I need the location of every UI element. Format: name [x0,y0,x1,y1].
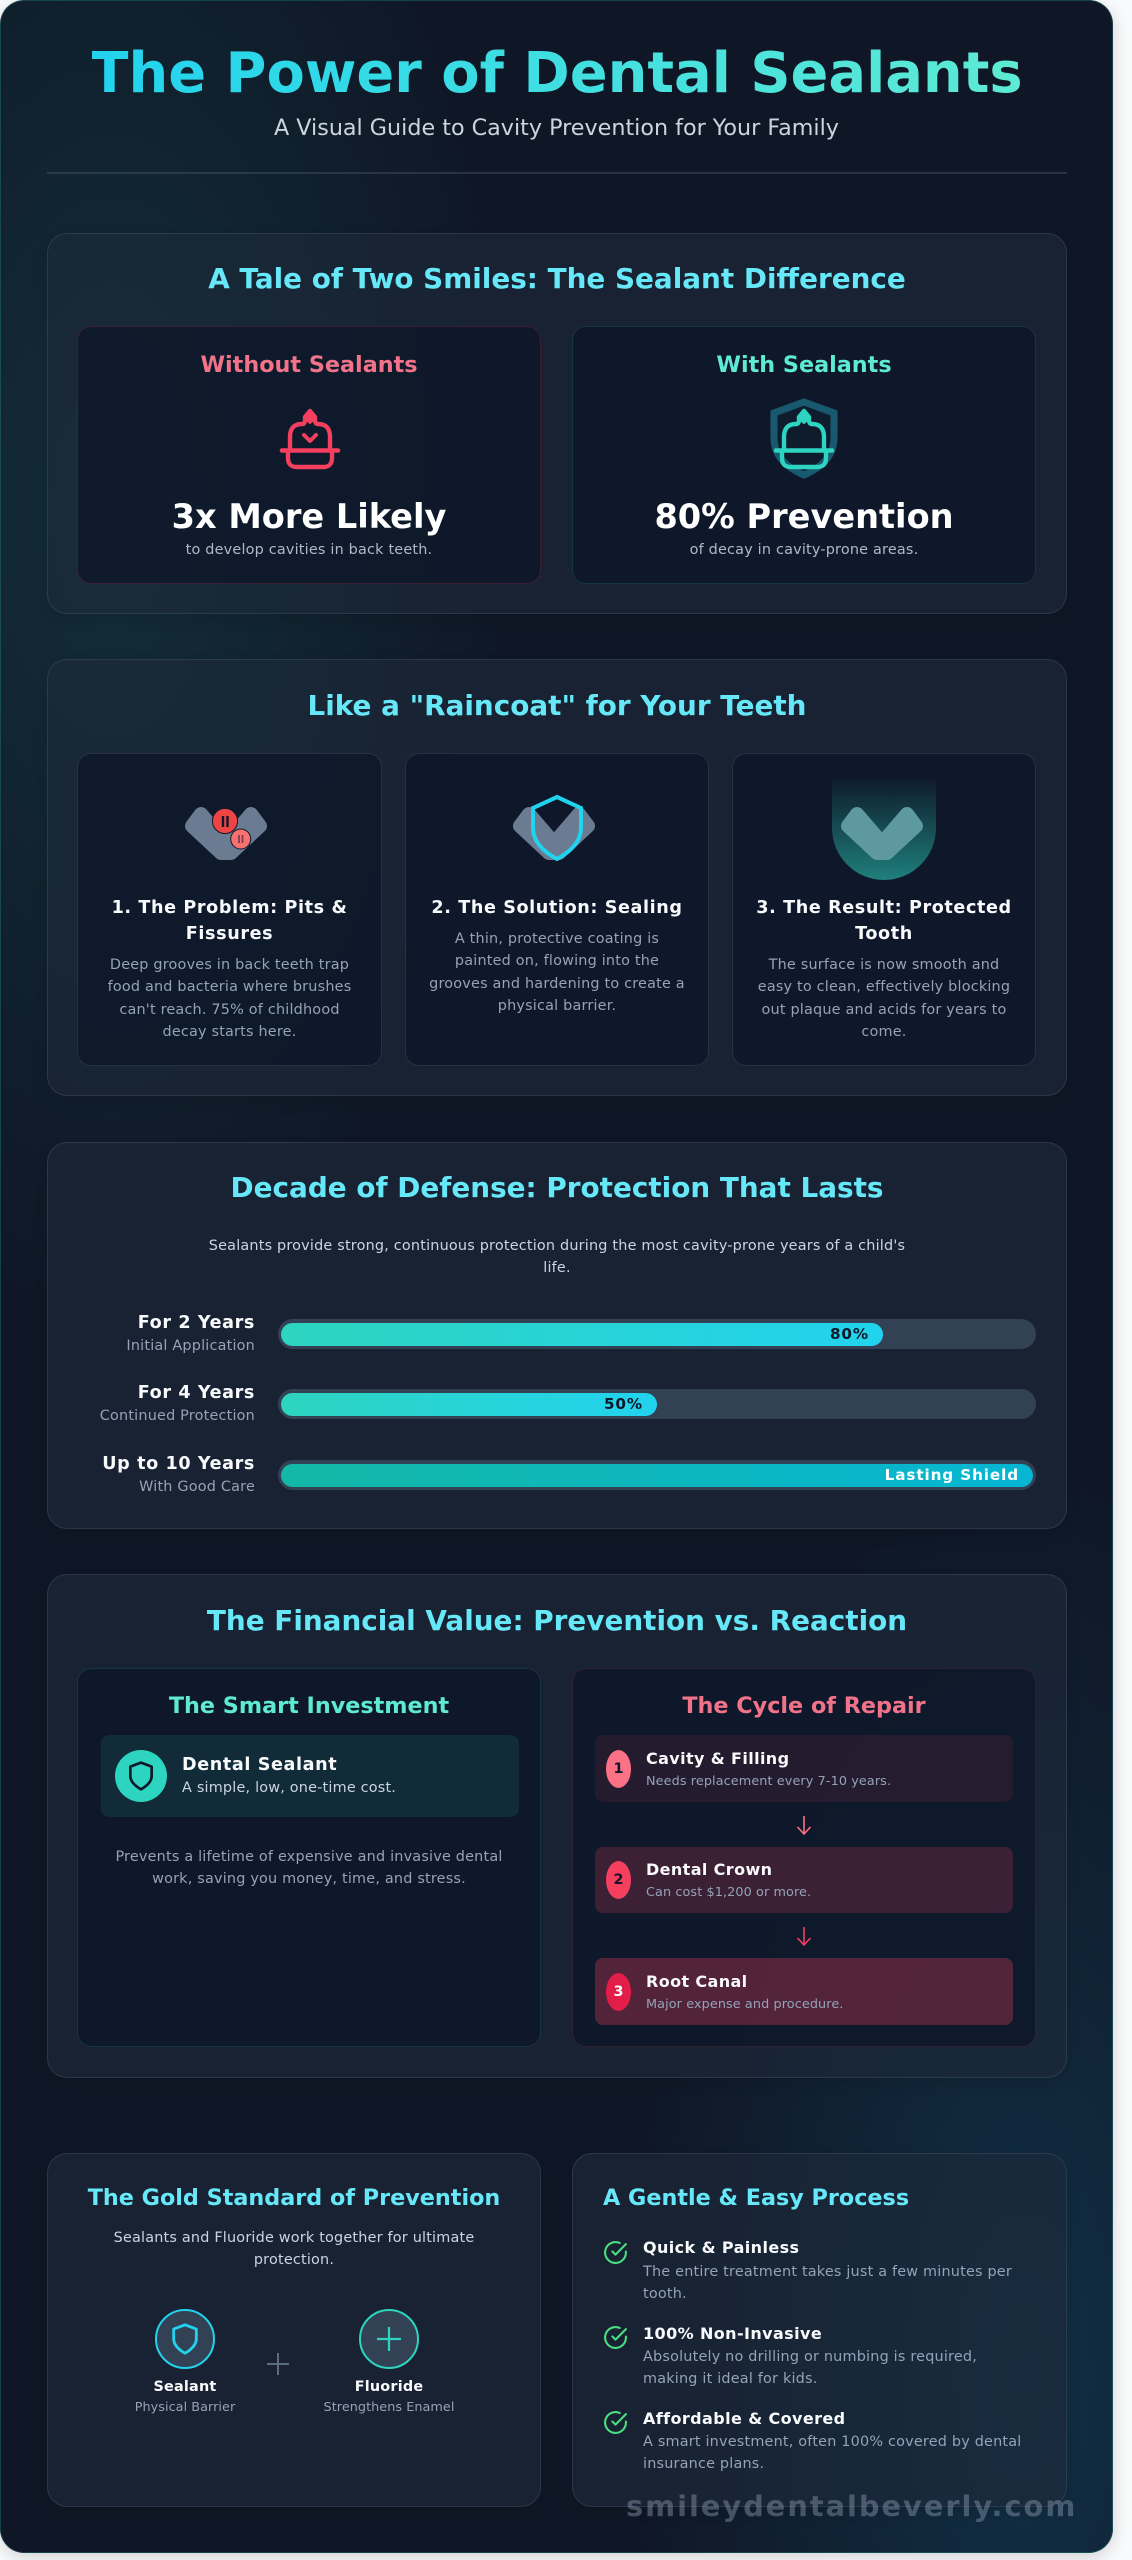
panel: step 1 [77,753,382,1066]
heading: raincoat: Like a "Raincoat" for Your Teeth [308,689,806,722]
watermark: smileydentalbeverly.com [626,2489,1077,2523]
item text: A smart investment, often 100% covered by dental [643,2434,1021,2450]
heading: financial value: The Financial Value: Prevention vs. Reaction [207,1604,907,1637]
step 2 text: physical barrier. [498,998,616,1014]
panel: cycle of repair [572,1668,1036,2047]
investment text: Prevents a lifetime of expensive and invasive dental [115,1849,503,1865]
root canal text: Major expense and procedure. [646,1997,843,2012]
stat: 3x more likely: 3x More Likely [172,497,446,536]
crown text: Can cost $1,200 or more. [646,1885,811,1900]
panel: step 2 [405,753,709,1066]
title: The Power of Dental Sealants [90,41,1023,106]
root canal title: Root Canal [646,1972,748,1991]
crown title: Dental Crown [646,1860,772,1879]
row sublabel: 4 years: Continued Protection [100,1408,255,1424]
icon: check [604,2241,627,2264]
panel: a tale of two smiles [47,233,1067,614]
step 3 heading [756,898,1012,944]
badge 1: 1 [613,1761,624,1777]
step 1 heading: 1. The Problem: Pits & [112,898,347,918]
bar: 50% [278,1389,1036,1419]
step: cavity and filling [595,1735,1013,1802]
panel: raincoat [47,659,1067,1096]
item text [643,2349,977,2387]
step 2 text [429,931,685,1014]
bar: 80% [278,1319,1036,1349]
step 2 text: painted on, flowing into the [455,953,659,969]
item text [642,2264,1012,2302]
heading: without sealants: Without Sealants [200,352,418,378]
heading: cycle of repair: The Cycle of Repair [682,1693,926,1719]
step: root canal [595,1958,1013,2025]
icon: shield badge [115,1750,167,1802]
step 1 text: Deep grooves in back teeth trap [110,957,349,973]
row label: 2 years: For 2 Years [138,1313,255,1333]
caption: cavities: to develop cavities in back teeth. [186,542,432,558]
bar: 80%: 80% [830,1325,869,1343]
step 3 text: come. [861,1024,907,1040]
fluoride sublabel: Strengthens Enamel [324,2400,454,2415]
step 1 text [108,957,351,1040]
intro text [209,1238,905,1276]
panel: without sealants [77,326,541,584]
bar: lasting shield [278,1460,1036,1490]
fluoride label: Fluoride [355,2379,423,2395]
badge 3: 3 [613,1984,624,2000]
item text: The entire treatment takes just a few minutes per [643,2264,1012,2280]
panel: decade of defense [47,1142,1067,1529]
row label: 4 years: For 4 Years [138,1383,255,1403]
badge 2: 2 [613,1872,624,1888]
step 3 heading: 3. The Result: Protected [756,898,1012,918]
caption: decay: of decay in cavity-prone areas. [690,542,918,558]
panel: smart investment [77,1668,541,2047]
sealant name: Dental Sealant [182,1755,337,1775]
item: quick and painless [604,2238,1012,2302]
gold standard text: Sealants and Fluoride work together for ultimate [114,2230,474,2246]
item text: making it ideal for kids. [643,2371,818,2387]
item title: 100% Non-Invasive [643,2324,822,2343]
panel: with sealants [572,326,1036,584]
panel: gold standard [47,2153,541,2507]
gold standard text [114,2230,474,2268]
icon: check [604,2411,627,2434]
cavity text: Needs replacement every 7-10 years. [646,1774,891,1789]
dental sealant box [101,1735,519,1817]
step 2 text: A thin, protective coating is [455,931,659,947]
badge 3 [606,1973,631,2011]
row sublabel: 2 years: Initial Application [126,1338,255,1354]
panel: step 3 [732,753,1036,1066]
step 3 text: The surface is now smooth and [769,957,999,973]
item: non-invasive [604,2324,977,2387]
sealant label: Sealant [153,2379,216,2395]
intro text: life. [543,1260,571,1276]
step 3 text: easy to clean, effectively blocking [758,979,1010,995]
icon: check [604,2326,627,2349]
heading: with sealants: With Sealants [716,352,892,378]
intro text: Sealants provide strong, continuous protection during the most cavity-prone years of a child's [209,1238,905,1254]
heading: gold standard: The Gold Standard of Prevention [88,2185,500,2211]
row label: 10 years: Up to 10 Years [102,1454,255,1474]
bar: lasting shield: Lasting Shield [885,1466,1019,1484]
panel: gentle process [572,2153,1067,2507]
item: affordable [604,2409,1021,2472]
step 3 text: out plaque and acids for years to [762,1002,1006,1018]
item text: insurance plans. [643,2456,764,2472]
gold standard text: protection. [254,2252,334,2268]
item title: Affordable & Covered [643,2409,846,2428]
investment text [115,1849,503,1887]
stat: 80% prevention: 80% Prevention [654,497,954,536]
badge 2 [606,1861,631,1899]
item text: tooth. [643,2286,687,2302]
step 3 text [758,957,1010,1040]
cavity title: Cavity & Filling [646,1749,789,1768]
panel: financial value [47,1574,1067,2078]
item title: Quick & Painless [643,2238,799,2257]
badge 1 [606,1750,631,1788]
item text [643,2434,1021,2472]
heading: smart investment: The Smart Investment [169,1693,449,1719]
step 1 text: decay starts here. [162,1024,296,1040]
step 1 text: food and bacteria where brushes [108,979,351,995]
step 1 text: can't reach. 75% of childhood [119,1002,340,1018]
step 1 heading: Fissures [186,924,273,944]
step 2 heading: 2. The Solution: Sealing [431,898,683,918]
icon: sealant circle [155,2309,215,2369]
investment text: work, saving you money, time, and stress. [152,1871,466,1887]
heading: a tale of two smiles: A Tale of Two Smiles: The Sealant Difference [208,262,906,295]
step: dental crown [595,1847,1013,1913]
icon: fluoride circle [359,2309,419,2369]
chart: protection bars [100,1313,1036,1495]
step 3 heading: Tooth [855,924,913,944]
heading: gentle process: A Gentle & Easy Process [603,2185,909,2211]
heading: decade of defense: Decade of Defense: Protection That Lasts [231,1171,883,1204]
sealant sublabel: Physical Barrier [135,2400,235,2415]
sealant cost: A simple, low, one-time cost. [182,1780,396,1796]
subtitle: A Visual Guide to Cavity Prevention for Your Family [274,115,839,141]
bar: 50%: 50% [604,1395,643,1413]
step 1 heading [112,898,347,944]
item text: Absolutely no drilling or numbing is required, [643,2349,977,2365]
step 2 text: grooves and hardening to create a [429,976,685,992]
row sublabel: 10 years: With Good Care [139,1479,255,1495]
